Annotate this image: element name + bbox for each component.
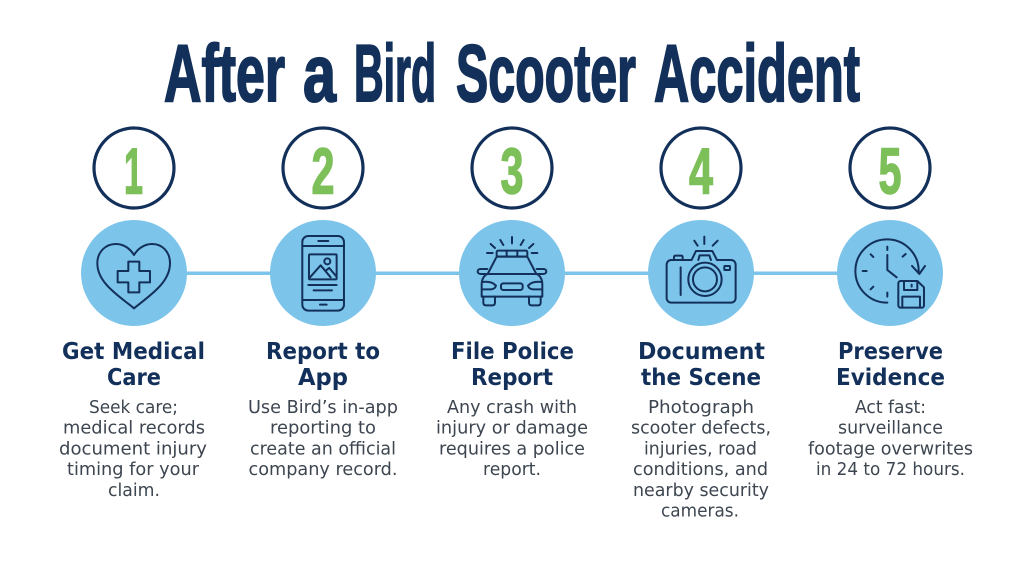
number badge 4	[661, 128, 741, 208]
icon: smartphone with image	[270, 220, 376, 326]
description: report to app: reporting to	[270, 419, 376, 439]
icon: camera with flash	[648, 220, 754, 326]
heading: report to app	[266, 339, 380, 391]
description: preserve evidence: surveillance	[838, 419, 943, 439]
step 1: get medical care	[59, 128, 207, 501]
heading: get medical care: Care	[107, 365, 161, 391]
heading: get medical care	[62, 339, 205, 391]
heading: preserve evidence: Preserve	[838, 339, 943, 365]
description: file police report: report.	[483, 460, 541, 480]
icon: heart with medical cross	[81, 220, 187, 326]
icon: police car	[459, 220, 565, 326]
description: get medical care: document injury	[59, 439, 207, 459]
number badge 2: 2	[312, 134, 334, 208]
description: preserve evidence: Act fast:	[855, 398, 926, 418]
description: preserve evidence	[808, 398, 973, 480]
description: document the scene: injuries, road	[644, 439, 757, 459]
number badge 1	[94, 128, 174, 208]
heading: get medical care: Get Medical	[62, 339, 205, 365]
description: get medical care: claim.	[108, 481, 160, 501]
step 5: preserve evidence	[808, 128, 973, 480]
heading: report to app: App	[298, 365, 348, 391]
description: get medical care: Seek care;	[89, 398, 178, 418]
number badge 2	[283, 128, 363, 208]
title: Accident	[654, 29, 860, 119]
description: document the scene: Photograph	[648, 398, 754, 418]
heading: preserve evidence	[836, 339, 945, 391]
number badge 3: 3	[500, 134, 524, 208]
heading: document the scene: the Scene	[641, 365, 761, 391]
number badge 1: 1	[124, 134, 143, 208]
heading: document the scene: Document	[638, 339, 765, 365]
description: file police report: Any crash with	[447, 398, 577, 418]
description: document the scene	[631, 398, 771, 522]
number badge 3	[472, 128, 552, 208]
title: After	[164, 29, 285, 119]
number badge 5	[850, 128, 930, 208]
description: file police report: requires a police	[439, 439, 585, 459]
description: file police report: injury or damage	[436, 419, 588, 439]
number badge 5: 5	[878, 134, 902, 208]
description: get medical care	[59, 398, 207, 501]
description: report to app: create an official	[250, 439, 396, 459]
number badge 4: 4	[689, 134, 713, 208]
step 3: file police report	[436, 128, 588, 480]
description: get medical care: medical records	[63, 419, 205, 439]
description: report to app	[248, 398, 398, 480]
description: document the scene: cameras.	[661, 502, 739, 522]
heading: file police report	[451, 339, 574, 391]
description: report to app: Use Bird’s in-app	[248, 398, 398, 418]
description: document the scene: scooter defects,	[631, 419, 771, 439]
step 4: document the scene	[631, 128, 771, 522]
heading: report to app: Report to	[266, 339, 380, 365]
description: file police report	[436, 398, 588, 480]
description: preserve evidence: footage overwrites	[808, 439, 973, 459]
timeline connector	[134, 272, 890, 275]
heading: file police report: File Police	[451, 339, 574, 365]
description: get medical care: timing for your	[67, 460, 200, 480]
heading: preserve evidence: Evidence	[836, 365, 945, 391]
heading: file police report: Report	[471, 365, 553, 391]
title: Scooter	[456, 29, 636, 119]
description: preserve evidence: in 24 to 72 hours.	[816, 460, 965, 480]
description: document the scene: conditions, and	[633, 460, 768, 480]
heading: document the scene	[638, 339, 765, 391]
title: a	[303, 29, 337, 119]
icon: clock with save disk	[837, 220, 943, 326]
description: report to app: company record.	[248, 460, 398, 480]
title: Bird	[354, 29, 436, 119]
description: document the scene: nearby security	[633, 481, 769, 501]
step 2: report to app	[248, 128, 398, 480]
